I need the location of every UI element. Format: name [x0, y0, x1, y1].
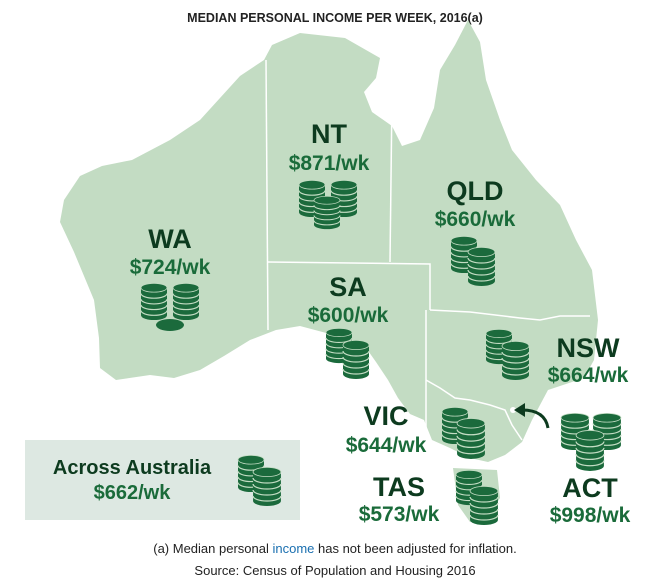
label: SA: $600/wk [308, 304, 389, 327]
label: NT: NT [311, 119, 347, 149]
label: QLD: $660/wk [435, 208, 516, 231]
ACT marker [510, 407, 516, 413]
label: VIC: VIC [363, 401, 409, 431]
label: QLD [435, 176, 516, 286]
label: NT [289, 119, 370, 229]
label: ACT [550, 413, 631, 527]
label: ACT: $998/wk [550, 504, 631, 527]
label: WA: $724/wk [130, 256, 211, 279]
label: WA: WA [148, 224, 192, 254]
national average box: Across Australia [53, 457, 212, 479]
label: VIC: $644/wk [346, 434, 427, 457]
label: NSW [486, 329, 629, 387]
title: MEDIAN PERSONAL INCOME PER WEEK, 2016(a) [187, 11, 483, 25]
label: TAS: $573/wk [359, 503, 440, 526]
label: QLD: QLD [446, 176, 504, 206]
label: ACT: ACT [562, 473, 618, 503]
national average box: $662/wk [94, 482, 171, 504]
map of Australia [60, 20, 598, 522]
label: TAS: TAS [373, 472, 425, 502]
source: Source: Census of Population and Housing 2016 [194, 563, 476, 578]
footnote: (a) Median personal income has not been adjusted for inflation. [153, 541, 517, 556]
label: TAS [359, 470, 498, 526]
label: NSW: NSW [556, 333, 620, 363]
label: NSW: $664/wk [548, 364, 629, 387]
label: VIC [346, 401, 485, 459]
arrow: ACT pointer [514, 403, 548, 428]
label: SA: SA [329, 272, 367, 302]
label: WA [130, 224, 211, 331]
label: NT: $871/wk [289, 152, 370, 175]
label: SA [308, 272, 389, 379]
national average box [25, 440, 300, 520]
Tasmania [453, 468, 500, 522]
